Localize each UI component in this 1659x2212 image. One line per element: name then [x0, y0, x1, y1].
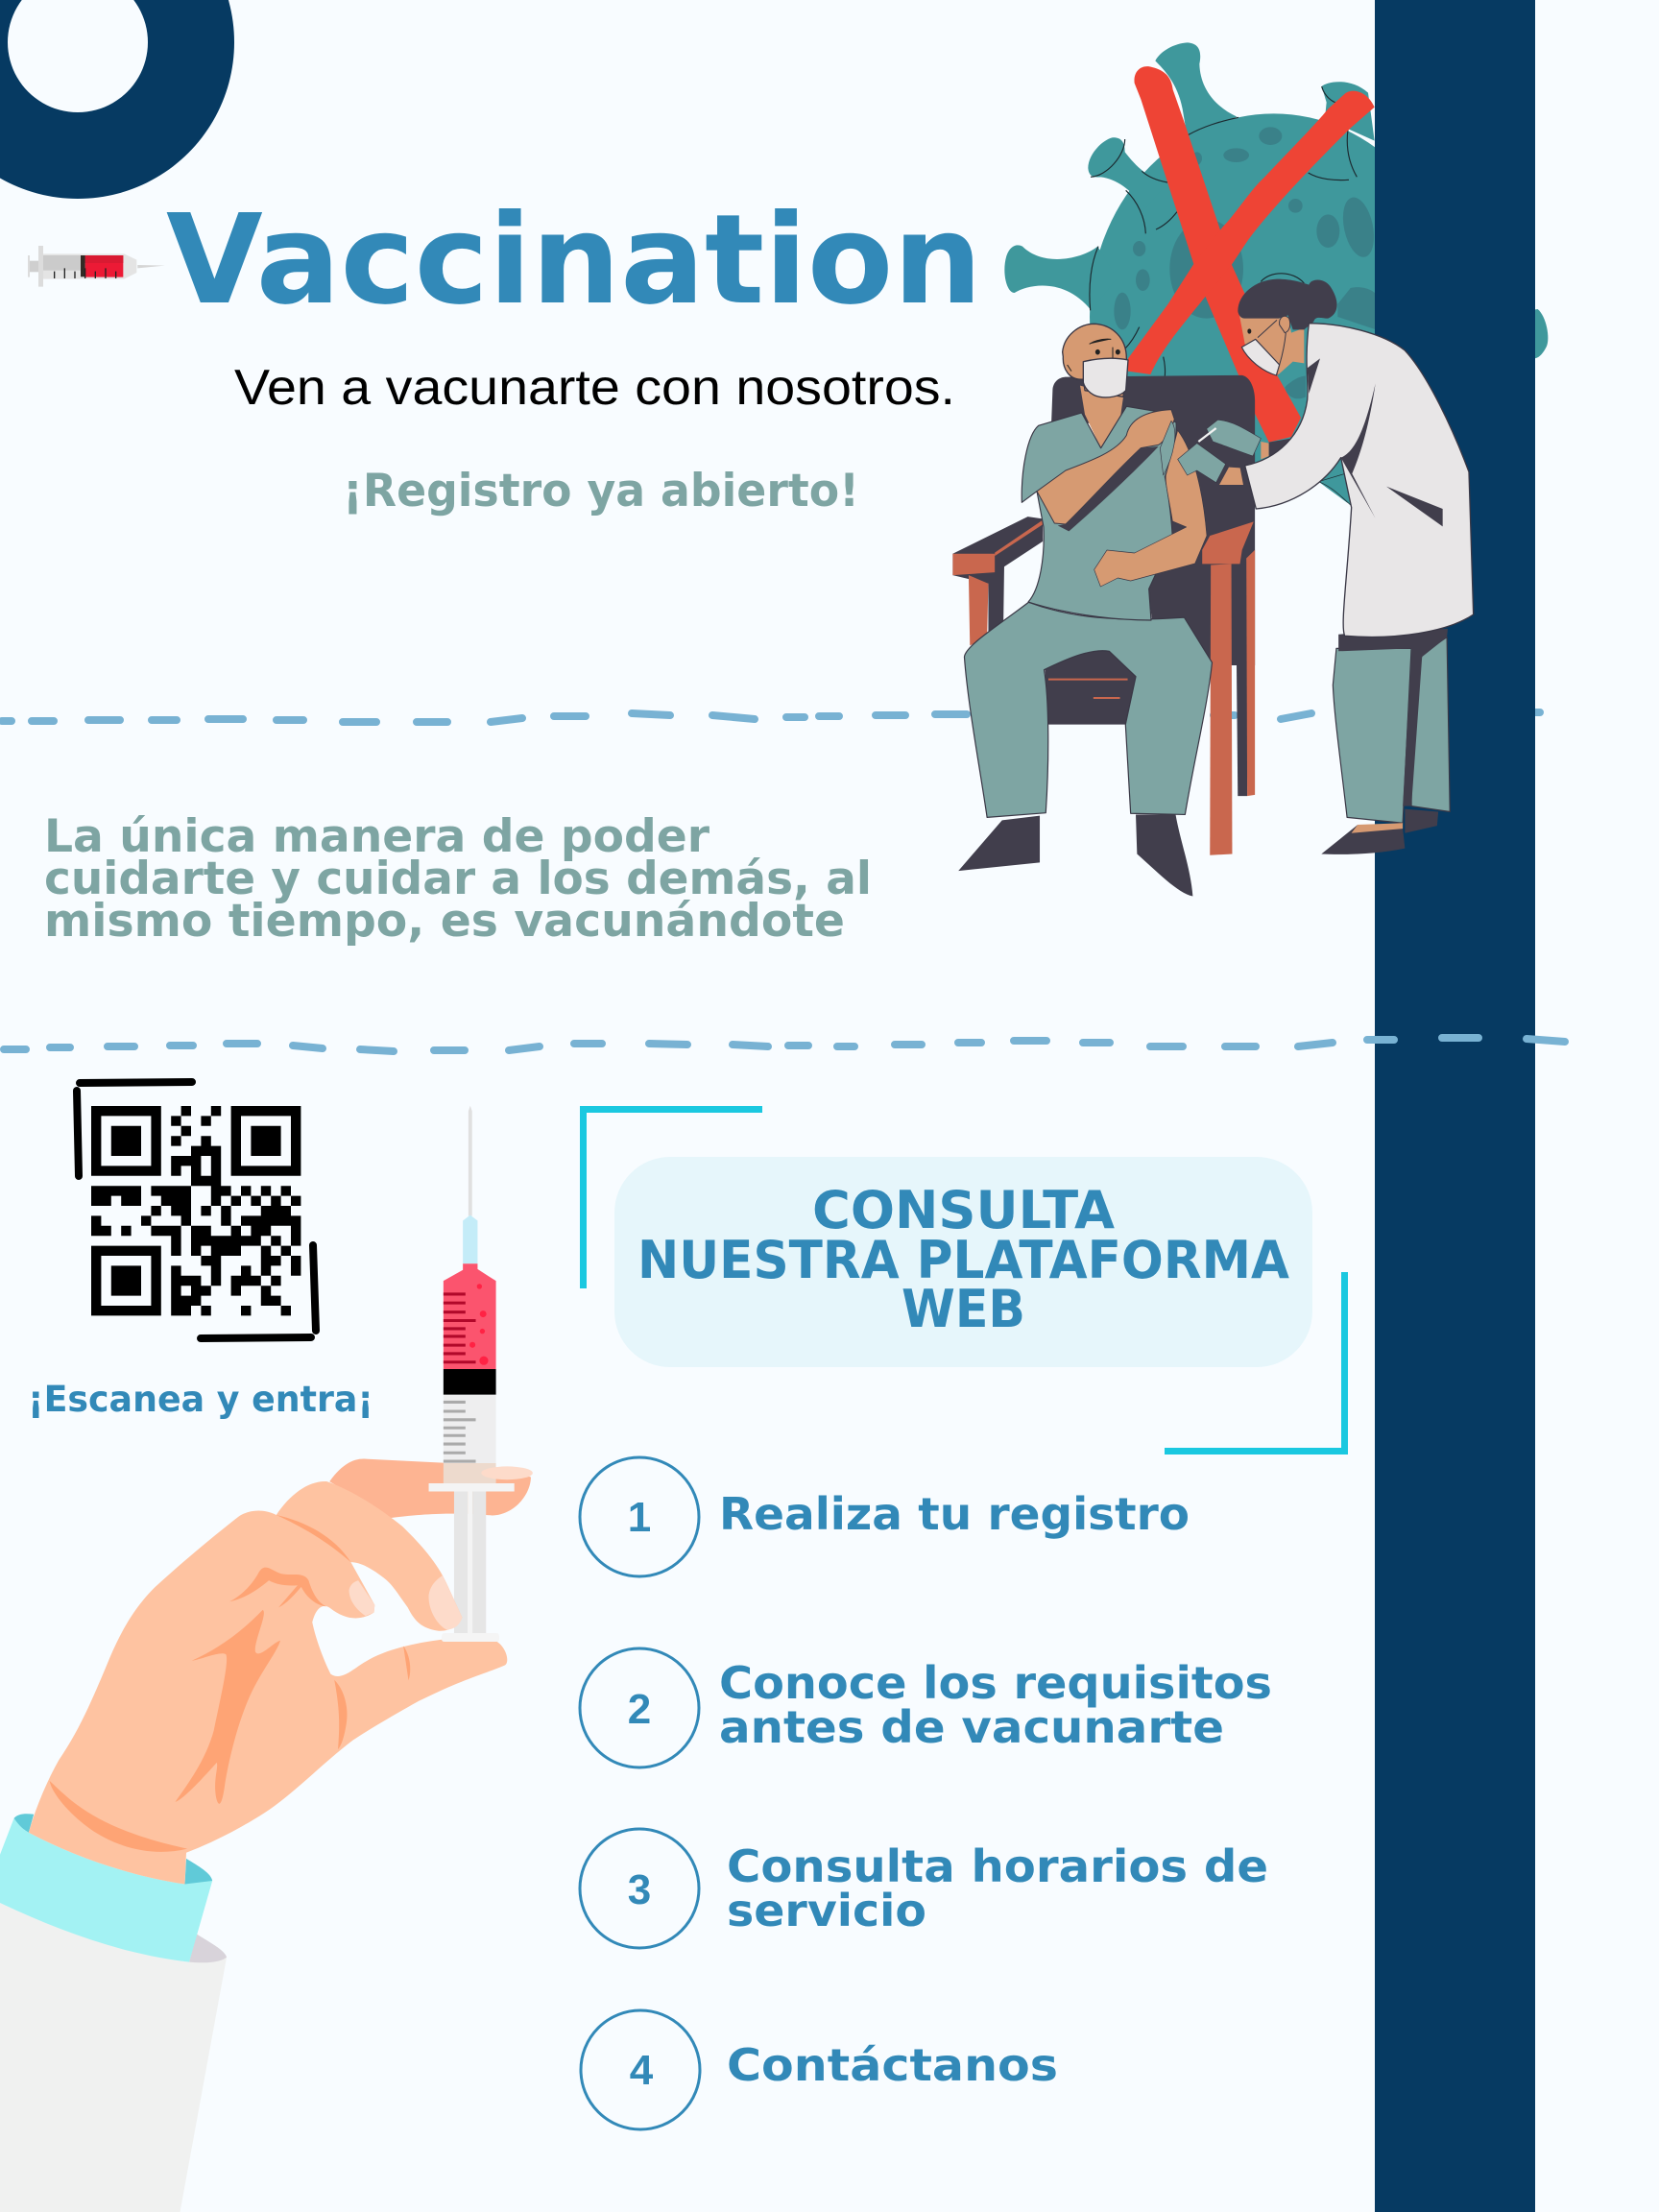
vertical navy bar — [1375, 0, 1535, 2212]
illustration: patient in chair — [952, 324, 1255, 897]
doctor wrists — [1219, 442, 1269, 485]
step 4: Contáctanos — [727, 2039, 1058, 2091]
patient upper arm and hand — [1094, 430, 1207, 587]
step 2: antes de vacunarte — [719, 1701, 1224, 1753]
scan caption: ¡Escanea y entra¡ — [28, 1379, 373, 1420]
back finger — [329, 1458, 531, 1518]
registration notice: ¡Registro ya abierto! — [343, 465, 859, 517]
step 2: Conoce los requisitos — [719, 1657, 1272, 1709]
shirt sleeve flap — [1160, 421, 1175, 475]
awareness paragraph: mismo tiempo, es vacunándote — [44, 895, 845, 948]
doctor trousers — [1333, 637, 1450, 823]
patient neck — [1080, 386, 1123, 448]
large syringe — [429, 1106, 533, 1634]
hand holding syringe — [29, 1481, 507, 1885]
syringe plunger base — [442, 1633, 499, 1642]
step 4: 4 — [630, 2047, 654, 2094]
QR corner brackets — [77, 1082, 316, 1338]
doctor face — [1239, 315, 1304, 374]
doctor ear and eye — [1280, 316, 1290, 333]
patient head — [1063, 324, 1126, 397]
teal patch below arm — [1318, 472, 1351, 506]
step 3: servicio — [727, 1885, 926, 1936]
web platform callout: NUESTRA PLATAFORMA — [637, 1230, 1289, 1290]
fingernails — [349, 1575, 462, 1629]
web platform callout: WEB — [902, 1279, 1025, 1339]
step 1: Realiza tu registro — [719, 1488, 1190, 1540]
title: Vaccination — [166, 188, 982, 332]
patient shoes — [958, 814, 1192, 897]
step 2: 2 — [628, 1686, 651, 1733]
doctor coat — [1245, 324, 1474, 637]
step 3: 3 — [628, 1866, 651, 1913]
doctor neck scarf — [1277, 362, 1308, 418]
patient crossed arm — [1037, 410, 1174, 524]
patient shirt — [1022, 406, 1176, 620]
awareness paragraph: La única manera de poder — [44, 810, 710, 863]
web platform callout — [614, 1157, 1312, 1367]
QR code — [77, 1082, 316, 1338]
chair back and frame — [952, 375, 1255, 855]
hand creases — [50, 1515, 410, 1852]
red cross over virus — [1128, 66, 1375, 443]
awareness paragraph: cuidarte y cuidar a los demás, al — [44, 853, 872, 905]
step 3 — [580, 1829, 1268, 1948]
small syringe icon — [28, 246, 165, 287]
step 1: 1 — [628, 1494, 651, 1541]
awareness paragraph — [44, 810, 872, 948]
web platform callout: CONSULTA — [812, 1180, 1115, 1240]
doctor hair — [1238, 279, 1337, 329]
cyan frame top left — [580, 1106, 762, 1288]
step 2 — [580, 1648, 1272, 1767]
step 1 — [580, 1457, 1190, 1576]
illustration: doctor — [1178, 279, 1474, 854]
virus illustration — [1004, 42, 1548, 541]
cyan frame bottom right — [1165, 1272, 1348, 1455]
doctor mask — [1241, 339, 1280, 375]
patient mask — [1083, 358, 1128, 397]
patient face details — [1068, 339, 1119, 372]
doctor shoes — [1321, 809, 1438, 854]
coat sleeve — [0, 1814, 227, 2212]
step 4 — [581, 2010, 1058, 2129]
decorative ring top left — [0, 0, 234, 199]
doctor gloves and syringe — [1178, 420, 1261, 483]
coat shadows and pocket — [1308, 358, 1443, 526]
step 3: Consulta horarios de — [727, 1840, 1268, 1892]
patient trousers — [964, 602, 1212, 817]
subtitle: Ven a vacunarte con nosotros. — [234, 360, 955, 416]
